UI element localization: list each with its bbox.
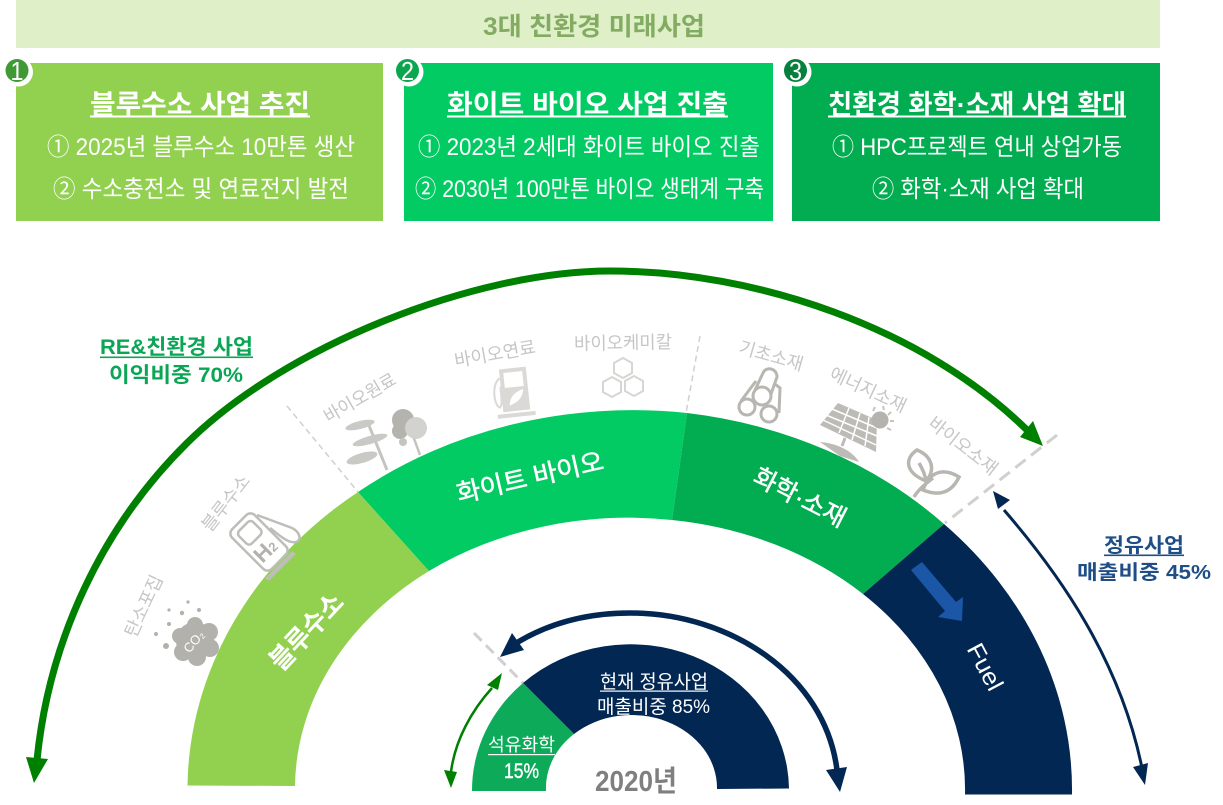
segment: refining: 매출비중 85% — [597, 696, 710, 718]
panel: blue hydrogen: ① 2025년 블루수소 10만톤 생산 — [47, 134, 355, 161]
label: carbon capture: 탄소포집 — [121, 572, 167, 640]
large arch chart 2030 — [188, 410, 1072, 794]
label: biochemical: 바이오케미칼 — [574, 332, 672, 354]
label: refining: 정유사업 — [1104, 534, 1184, 557]
segment: blue hydrogen — [188, 492, 429, 786]
label: biofuel: 바이오연료 — [453, 337, 537, 371]
title banner: 3대 친환경 미래사업 — [483, 13, 705, 41]
segment: fuel — [863, 524, 1072, 794]
panel: blue hydrogen: ② 수소충전소 및 연료전지 발전 — [53, 176, 349, 203]
year label: 2020년 — [595, 765, 677, 798]
label: blue hydrogen: 블루수소 — [198, 471, 254, 535]
panel: white bio: ② 2030년 100만톤 바이오 생태계 구축 — [415, 176, 764, 203]
label: bio materials: 바이오소재 — [925, 413, 1001, 479]
panel: chemicals and materials: ② 화학·소재 사업 확대 — [872, 176, 1084, 203]
icon: CO2 cloud: CO₂ — [180, 627, 207, 656]
segment: petrochemicals: 15% — [504, 760, 539, 783]
icon: hydrogen pump: H2 — [248, 533, 282, 567]
panel: chemicals and materials: 친환경 화학·소재 사업 확대 — [828, 90, 1126, 120]
segment: blue hydrogen: 블루수소 — [264, 587, 350, 676]
title banner — [16, 0, 1160, 48]
label: RE and eco business: RE&친환경 사업 — [100, 336, 253, 359]
panel: chemicals and materials: 3 — [789, 56, 802, 86]
panel: white bio — [394, 56, 773, 221]
arrow: small petrochemical span — [444, 673, 502, 788]
label: refining — [1077, 534, 1211, 584]
segment: petrochemicals — [472, 683, 574, 791]
panel: blue hydrogen — [4, 56, 383, 221]
panel: white bio: 화이트 바이오 사업 진출 — [447, 90, 728, 120]
icon: solar panel — [820, 403, 894, 462]
arrow: RE and eco business span — [26, 271, 1043, 783]
label: energy materials: 에너지소재 — [827, 364, 909, 416]
panel: white bio: ① 2023년 2세대 화이트 바이오 진출 — [418, 134, 760, 161]
segment: refining — [523, 644, 789, 789]
arrow: small refining span — [500, 613, 847, 792]
segment: white bio — [358, 410, 687, 571]
panel: blue hydrogen: 1 — [10, 56, 24, 86]
icon: sprout — [909, 450, 959, 497]
icon: CO2 cloud — [154, 600, 219, 666]
icon: trees — [344, 409, 427, 470]
segment: chemicals and materials — [672, 413, 944, 594]
label: refining: 매출비중 45% — [1077, 561, 1211, 584]
segment: chemicals and materials: 화학·소재 — [749, 463, 850, 533]
panel: chemicals and materials — [782, 56, 1160, 221]
segment: refining: 현재 정유사업 — [600, 671, 708, 693]
icon: hydrogen pump — [228, 511, 299, 580]
segment: fuel: Fuel — [961, 639, 1008, 696]
label: bio feedstock: 바이오원료 — [320, 369, 400, 427]
small arch chart 2020 — [472, 644, 789, 791]
segment: petrochemicals: 석유화학 — [488, 735, 555, 755]
label: RE and eco business: 이익비중 70% — [109, 364, 243, 387]
label: basic materials: 기초소재 — [737, 337, 805, 375]
panel: chemicals and materials: ① HPC프로젝트 연내 상업가동 — [832, 134, 1122, 161]
label: RE and eco business — [100, 336, 253, 387]
icon: biofuel pump — [492, 366, 536, 419]
icon: pipes — [739, 369, 780, 422]
divider lines — [287, 336, 1057, 683]
segment: white bio: 화이트 바이오 — [454, 447, 606, 508]
arrow: refining span — [993, 491, 1148, 785]
icon: hexagons — [603, 358, 643, 397]
panel: white bio: 2 — [401, 56, 414, 86]
arrow: fuel down — [911, 562, 963, 621]
panel: blue hydrogen: 블루수소 사업 추진 — [90, 90, 310, 120]
